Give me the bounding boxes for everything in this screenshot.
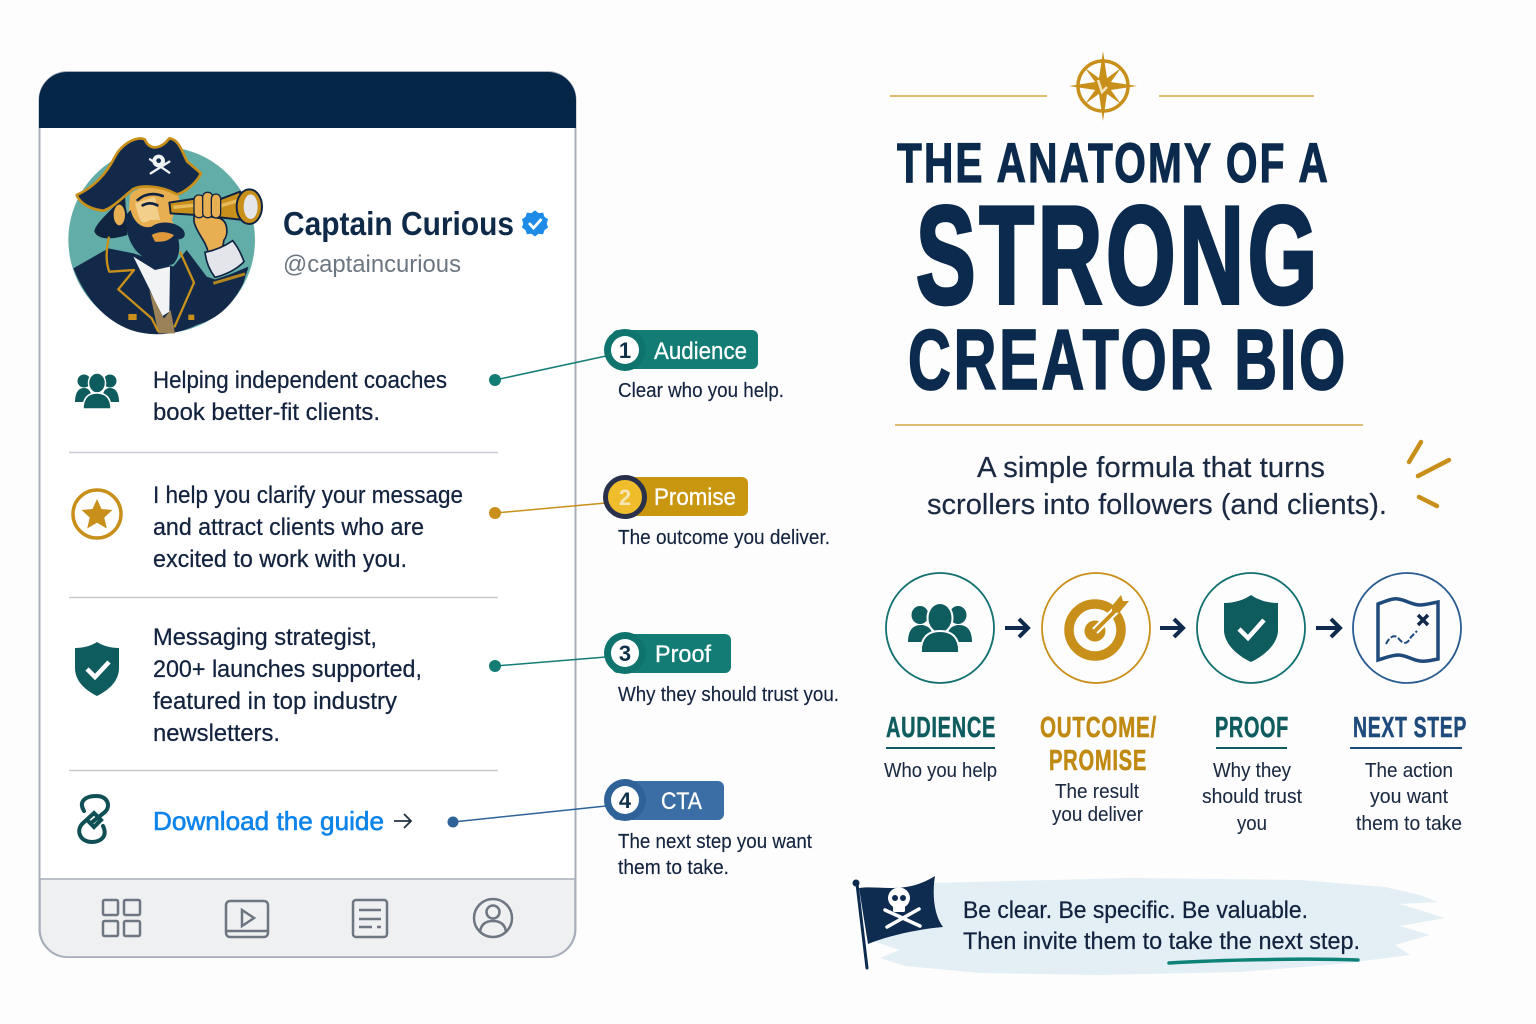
callout connector: proof: [489, 657, 606, 672]
step: proof: Why they: [1213, 759, 1292, 782]
callout: promise: [606, 477, 830, 549]
step: proof: PROOF: [1215, 712, 1289, 744]
step: next step: you want: [1370, 785, 1448, 808]
title: STRONG: [916, 178, 1321, 333]
promise text: and attract clients who are: [153, 514, 424, 541]
proof text: [153, 624, 422, 747]
arrow: link arrow: [394, 814, 411, 828]
step: outcome / promise: OUTCOME/: [1040, 712, 1157, 744]
banner text: [963, 897, 1360, 955]
bottom navigation bar: [40, 879, 575, 957]
proof text: 200+ launches supported,: [153, 656, 422, 683]
step: outcome / promise: [1040, 573, 1157, 826]
avatar: pirate with spyglass: [68, 138, 262, 334]
step: audience: [884, 573, 997, 782]
callout: closing message banner: [852, 876, 1445, 975]
banner text: Then invite them to take the next step.: [963, 928, 1360, 955]
icon: profile: [474, 899, 512, 937]
icon: target: [1069, 595, 1129, 656]
callout: promise: 2: [619, 485, 631, 510]
arrow: proof to next step: [1316, 619, 1340, 637]
icon: shield: [1224, 595, 1278, 662]
step: outcome / promise: PROMISE: [1049, 745, 1147, 777]
proof text: newsletters.: [153, 720, 280, 747]
subtitle: scrollers into followers (and clients).: [927, 489, 1387, 521]
arrow: audience to outcome: [1005, 619, 1028, 637]
icon: treasure map: [1378, 599, 1438, 661]
title: CREATOR BIO: [908, 313, 1348, 408]
callout: proof: [604, 632, 839, 706]
call to action link: Download the guide: [153, 806, 384, 836]
icon: shield check: [75, 642, 119, 696]
step: audience: Who you help: [884, 759, 997, 782]
step: proof: you: [1237, 812, 1267, 835]
callout: proof: Why they should trust you.: [618, 684, 839, 706]
callout connector: promise: [489, 503, 606, 519]
audience text: book better-fit clients.: [153, 399, 380, 426]
subtitle: [927, 452, 1387, 521]
step: audience: AUDIENCE: [886, 712, 996, 744]
callout: proof: 3: [619, 641, 631, 666]
callout: audience: [604, 329, 784, 402]
step: next step: them to take: [1356, 812, 1462, 835]
step: proof: should trust: [1202, 785, 1302, 808]
promise text: I help you clarify your message: [153, 482, 463, 509]
icon: star in circle: [73, 490, 121, 538]
callout: CTA: The next step you want: [618, 831, 812, 853]
audience text: Helping independent coaches: [153, 367, 447, 394]
callout: promise: The outcome you deliver.: [618, 527, 830, 549]
icon: pirate flag: [852, 876, 943, 968]
account name: Captain Curious: [283, 205, 514, 242]
account handle: @captaincurious: [283, 251, 461, 278]
callout: CTA: CTA: [661, 788, 702, 815]
icon: document: [353, 900, 387, 937]
callout connector: CTA: [448, 806, 606, 828]
subtitle: A simple formula that turns: [977, 452, 1325, 484]
panel: profile card: [39, 72, 576, 957]
icon: grid: [103, 900, 140, 936]
title: [897, 131, 1348, 408]
step: outcome / promise: The result: [1055, 780, 1139, 803]
accent underline: [1169, 959, 1358, 963]
callout: proof: Proof: [655, 641, 711, 668]
arrow: outcome to proof: [1160, 619, 1183, 637]
title ornament: compass rose: [890, 51, 1314, 121]
icon: video: [226, 901, 268, 937]
icon: audience people: [75, 373, 119, 409]
title: THE ANATOMY OF A: [897, 131, 1330, 194]
promise text: [153, 482, 463, 573]
card header bar: [39, 72, 576, 128]
callout: CTA: them to take.: [618, 857, 729, 879]
step: next step: [1350, 573, 1467, 835]
icon: link: [79, 796, 108, 842]
callout: audience: 1: [619, 338, 631, 363]
callout: audience: Audience: [654, 338, 747, 365]
callout connector: audience: [489, 356, 606, 386]
step: next step: NEXT STEP: [1353, 712, 1467, 744]
step: proof: [1197, 573, 1305, 835]
callout: CTA: [604, 779, 812, 879]
banner text: Be clear. Be specific. Be valuable.: [963, 897, 1308, 924]
brush stroke background: [875, 878, 1445, 975]
callout: CTA: 4: [619, 788, 632, 813]
step: next step: The action: [1365, 759, 1453, 782]
promise text: excited to work with you.: [153, 546, 407, 573]
audience text: [153, 367, 447, 426]
verified badge: [522, 210, 548, 237]
callout: audience: Clear who you help.: [618, 380, 784, 402]
callout: promise: Promise: [654, 484, 736, 511]
proof text: featured in top industry: [153, 688, 397, 715]
step: outcome / promise: you deliver: [1052, 803, 1143, 826]
accent: spark marks: [1409, 442, 1449, 506]
icon: people: [908, 603, 972, 653]
proof text: Messaging strategist,: [153, 624, 377, 651]
